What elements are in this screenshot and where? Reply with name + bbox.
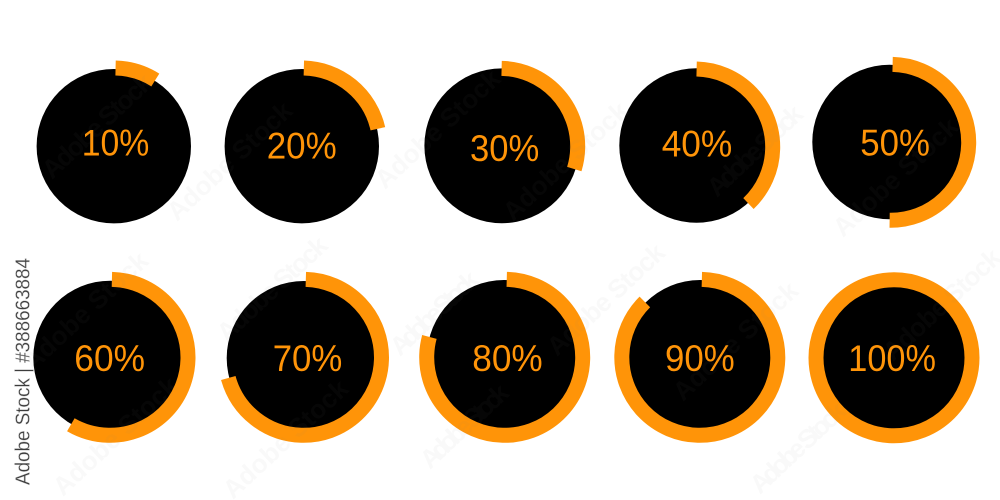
disc [623, 280, 777, 434]
watermark: faint diagonal Adobe Stock marks: Adobe Stock [667, 275, 804, 406]
watermark: faint diagonal Adobe Stock marks: Adobe Stock [701, 98, 809, 202]
disc [225, 69, 379, 223]
disc [227, 281, 381, 435]
value: 60% [74, 338, 145, 379]
watermark: faint diagonal Adobe Stock marks: Adobe Stock [827, 111, 964, 242]
progress arc [615, 67, 775, 227]
watermark: faint diagonal Adobe Stock marks: Adobe Stock [497, 95, 634, 226]
disc [424, 68, 579, 223]
progress arc [620, 277, 780, 437]
value: 50% [860, 122, 930, 164]
watermark: faint diagonal Adobe Stock marks: Adobe Stock [541, 237, 671, 361]
side credit text: Adobe Stock | #388663884 [12, 258, 34, 485]
disc [822, 286, 966, 430]
disc [33, 281, 187, 435]
progress arc [811, 62, 971, 222]
gauge: 60% [30, 277, 190, 437]
watermark: faint diagonal Adobe Stock marks: Adobe Stock [414, 377, 515, 474]
disc [619, 68, 774, 223]
watermark: faint diagonal Adobe Stock marks: Adobe Stock [17, 245, 154, 376]
gauge: 20% [222, 66, 382, 226]
disc [37, 69, 191, 223]
watermark: faint diagonal Adobe Stock marks: Adobe Stock [744, 395, 852, 499]
progress arc [425, 277, 585, 437]
disc [812, 65, 967, 219]
value: 90% [665, 338, 735, 379]
value: 10% [82, 122, 149, 164]
progress arc [222, 66, 382, 226]
progress arc [223, 277, 384, 438]
watermark: faint diagonal Adobe Stock marks: Adobe Stock [384, 264, 485, 361]
value: 20% [267, 126, 337, 166]
gauge: 70% [223, 277, 384, 438]
gauge: 30% [420, 66, 580, 226]
progress arc [30, 277, 190, 437]
value: 100% [848, 338, 936, 379]
value: 70% [273, 338, 342, 379]
gauge: 10% [34, 66, 194, 226]
watermark: faint diagonal Adobe Stock marks: Adobe Stock [369, 63, 506, 194]
watermark: faint diagonal Adobe Stock marks: Adobe Stock [211, 230, 334, 347]
watermark: faint diagonal Adobe Stock marks: Adobe Stock [47, 370, 184, 500]
watermark: faint diagonal Adobe Stock marks: Adobe Stock [36, 67, 159, 184]
value: 80% [472, 338, 543, 379]
gauge: 90% [620, 277, 780, 437]
gauge: 50% [811, 62, 971, 222]
value: 40% [662, 123, 732, 164]
disc [427, 280, 581, 434]
watermark: faint diagonal Adobe Stock marks: Adobe Stock [161, 95, 298, 226]
progress arc [420, 66, 580, 226]
gauge: 80% [425, 277, 585, 437]
progress ring [816, 280, 972, 436]
value: 30% [470, 128, 539, 169]
gauge: 100% [816, 280, 972, 436]
progress arc [34, 66, 194, 226]
gauge: 40% [615, 67, 775, 227]
